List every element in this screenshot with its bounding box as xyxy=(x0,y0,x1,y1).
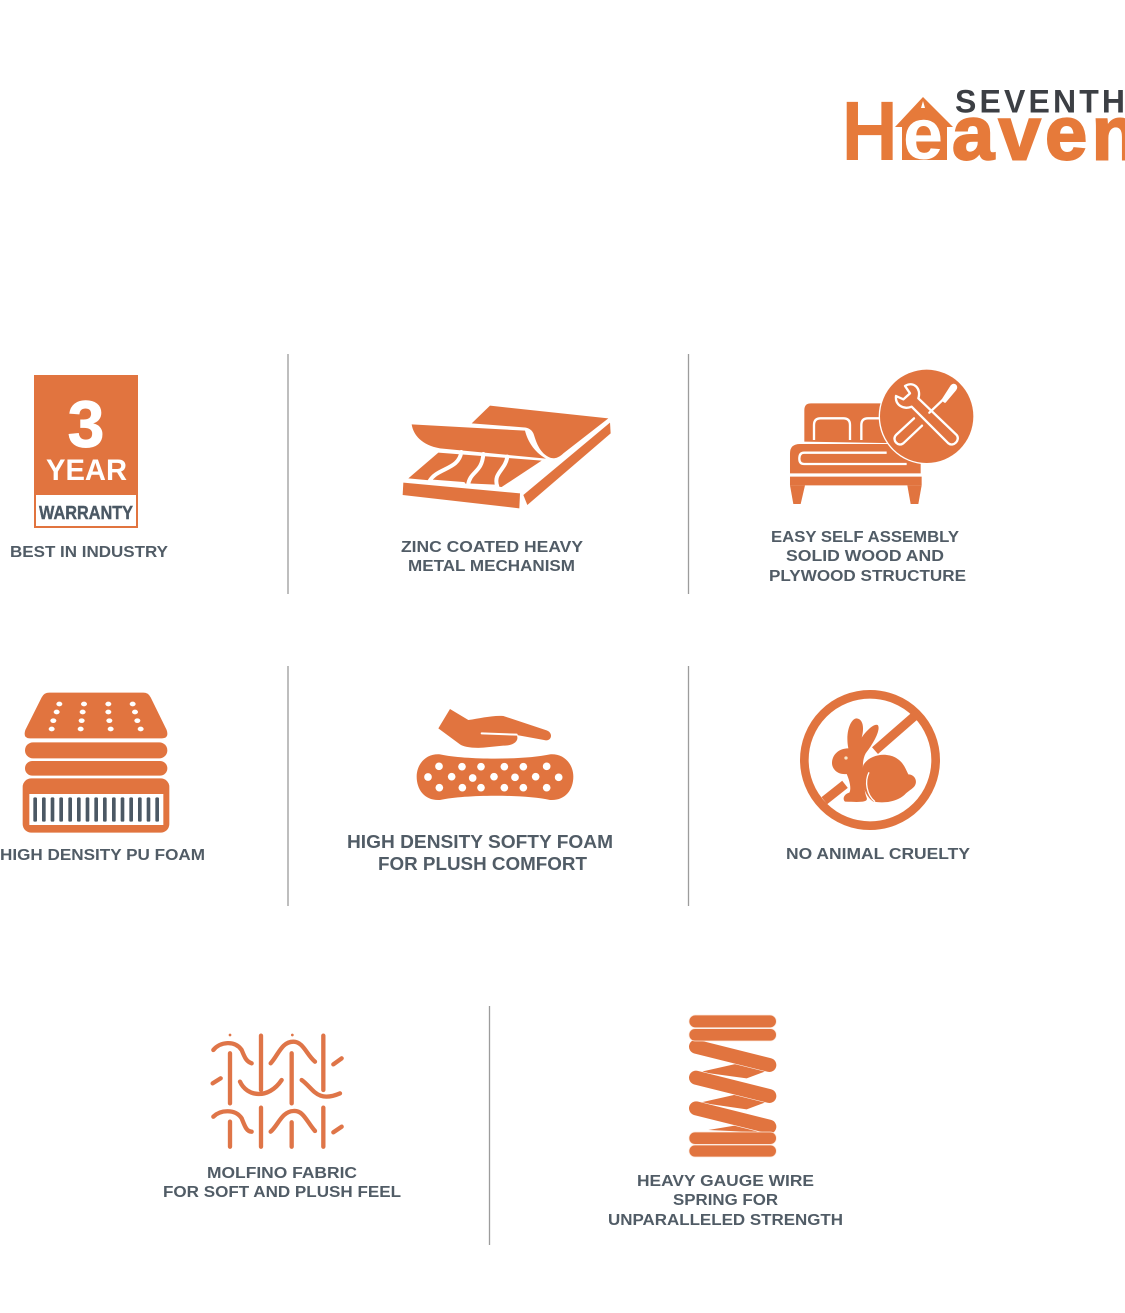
badge word: warranty: WARRANTY xyxy=(39,502,134,523)
label: heavy gauge wire spring: HEAVY GAUGE WIRE xyxy=(637,1173,814,1190)
badge number: 3 xyxy=(68,387,104,461)
icon: foam layers xyxy=(23,693,169,833)
icon: metal mechanism xyxy=(403,406,611,508)
label: easy self assembly: EASY SELF ASSEMBLY xyxy=(771,529,959,546)
label: best in industry: BEST IN INDUSTRY xyxy=(10,544,168,561)
panel: metal mechanism xyxy=(401,406,611,575)
logo house with e xyxy=(895,95,953,175)
label: heavy gauge wire spring: SPRING FOR xyxy=(673,1192,778,1209)
label: molfino fabric: MOLFINO FABRIC xyxy=(207,1165,357,1182)
panel: pu foam xyxy=(0,693,205,864)
icon: woven fabric xyxy=(213,1035,342,1147)
panel: softy foam xyxy=(347,709,613,874)
label: molfino fabric xyxy=(163,1165,401,1201)
label: zinc coated metal mechanism: ZINC COATED HEAVY xyxy=(401,539,583,556)
panel: no animal cruelty xyxy=(786,694,970,863)
label: no animal cruelty: NO ANIMAL CRUELTY xyxy=(786,846,970,863)
label: zinc coated metal mechanism xyxy=(401,539,583,575)
label: high density softy foam: FOR PLUSH COMFORT xyxy=(378,854,587,874)
panel: molfino fabric xyxy=(163,1035,401,1201)
logo word: SEVENTH: SEVENTH xyxy=(955,84,1125,120)
wrench xyxy=(896,384,958,444)
panel: wire spring xyxy=(608,1015,843,1229)
logo house with e: e xyxy=(903,95,943,175)
label: easy self assembly: SOLID WOOD AND xyxy=(786,548,944,565)
logo letter: H: H xyxy=(842,85,898,179)
icon: 3 year warranty badge xyxy=(34,375,138,528)
badge word: year: YEAR xyxy=(46,454,127,487)
label: high density softy foam: HIGH DENSITY SOFTY FOAM xyxy=(347,832,613,852)
label: heavy gauge wire spring xyxy=(608,1173,843,1229)
bed xyxy=(790,403,922,504)
tools badge xyxy=(879,368,975,464)
label: heavy gauge wire spring: UNPARALLELED STRENGTH xyxy=(608,1212,843,1229)
icon: hand over foam xyxy=(417,709,573,800)
label: high density pu foam: HIGH DENSITY PU FOAM xyxy=(0,847,205,864)
logo: Seventh Heaven xyxy=(842,84,1125,179)
panel: warranty xyxy=(10,375,168,561)
icon: crossed-out rabbit xyxy=(804,694,936,826)
icon: bed with tools xyxy=(790,368,975,504)
label: zinc coated metal mechanism: METAL MECHANISM xyxy=(408,558,575,575)
label: easy self assembly xyxy=(769,529,966,585)
panel: self assembly xyxy=(769,368,975,585)
icon: coil spring xyxy=(689,1015,776,1157)
label: molfino fabric: FOR SOFT AND PLUSH FEEL xyxy=(163,1184,401,1201)
screwdriver xyxy=(894,385,956,444)
label: easy self assembly: PLYWOOD STRUCTURE xyxy=(769,568,966,585)
label: high density softy foam xyxy=(347,832,613,874)
